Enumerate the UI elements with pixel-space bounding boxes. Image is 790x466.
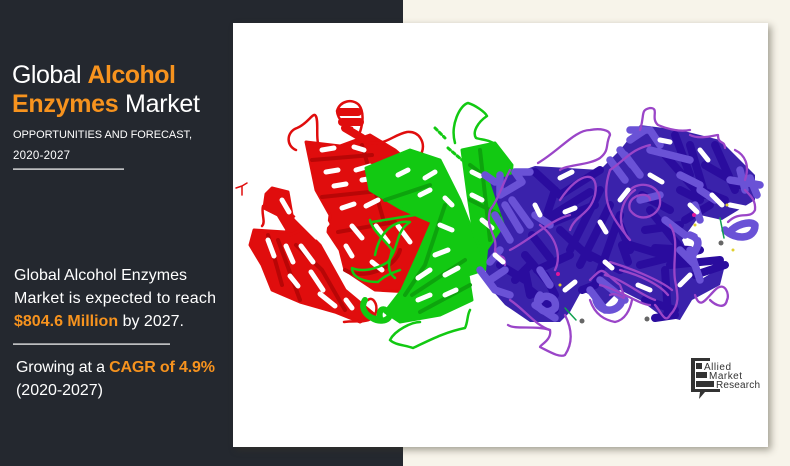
subtitle: 2020-2027 bbox=[13, 150, 70, 162]
red protein chain bbox=[236, 101, 462, 322]
subtitle: OPPORTUNITIES AND FORECAST, bbox=[13, 129, 192, 141]
title: Enzymes Market bbox=[12, 90, 200, 118]
CAGR statement bbox=[16, 359, 215, 399]
green protein chain bbox=[352, 103, 512, 348]
dark left panel bbox=[0, 0, 403, 466]
title bbox=[12, 61, 200, 118]
blue chain gaps bbox=[495, 140, 745, 290]
lilac protein ribbons bbox=[480, 130, 760, 318]
market size statement: $804.6 Million by 2027. bbox=[14, 313, 184, 330]
protein illustration bbox=[236, 101, 760, 356]
purple protein strands bbox=[489, 108, 755, 356]
CAGR statement: (2020-2027) bbox=[16, 382, 103, 399]
white image card bbox=[233, 23, 768, 447]
subtitle bbox=[13, 129, 192, 162]
green shaded ribbons bbox=[385, 150, 500, 312]
title: Global Alcohol bbox=[12, 61, 176, 89]
green chain gaps bbox=[398, 170, 492, 300]
logo: Allied Market Research: Market bbox=[709, 371, 742, 382]
ligand and ion details bbox=[556, 204, 734, 324]
market size statement: Global Alcohol Enzymes bbox=[14, 267, 187, 284]
market size statement: Market is expected to reach bbox=[14, 290, 216, 307]
red shaded ribbons bbox=[268, 145, 400, 310]
red chain gaps bbox=[268, 147, 410, 308]
CAGR statement: Growing at a CAGR of 4.9% bbox=[16, 359, 215, 376]
logo: Allied Market Research: Allied bbox=[704, 362, 731, 373]
logo: Allied Market Research bbox=[691, 358, 760, 399]
blue protein chain bbox=[485, 125, 755, 322]
logo: Allied Market Research: Research bbox=[716, 380, 760, 391]
market size statement bbox=[14, 267, 216, 330]
